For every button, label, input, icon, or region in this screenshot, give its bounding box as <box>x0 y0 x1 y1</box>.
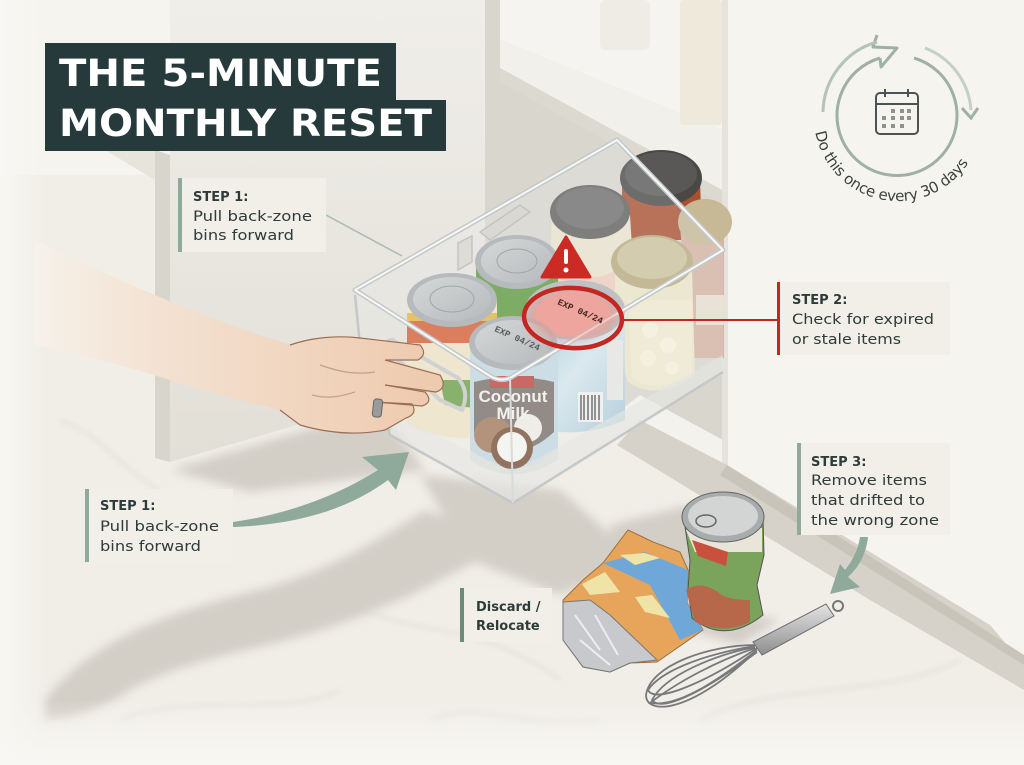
callout: step 1 lower: Pull back-zone <box>100 519 219 535</box>
callout: step 3: Remove items <box>811 473 927 489</box>
can: coconut milk: Coconut <box>479 387 548 406</box>
right cabinet panel <box>727 0 1024 660</box>
arrow: pull forward <box>233 452 409 527</box>
crushed can with beans <box>682 492 764 631</box>
callout: step 3: that drifted to <box>811 493 925 509</box>
chips bag <box>563 530 703 672</box>
callout: step 2 <box>622 282 950 355</box>
text: frequency note: Do this once every 30 days <box>816 131 968 204</box>
callout: discard or relocate <box>460 588 552 642</box>
callout: step 1 lower: STEP 1: <box>100 499 155 514</box>
callout: step 1 lower <box>85 489 233 562</box>
can: coconut milk <box>469 316 558 474</box>
callout: step 3 <box>797 443 950 535</box>
callout: discard or relocate: Relocate <box>476 619 540 634</box>
marble veins <box>60 420 960 722</box>
cabinet interior <box>485 0 727 465</box>
warning triangle icon <box>542 237 590 277</box>
bin back and jars <box>407 150 732 474</box>
callout: discard or relocate: Discard / <box>476 600 541 615</box>
jar: red sauce <box>620 150 702 240</box>
can: coconut milk: EXP 04/24 <box>493 325 542 354</box>
callout: step 1 upper: STEP 1: <box>193 190 248 205</box>
callout: step 3: the wrong zone <box>811 513 939 529</box>
icon: wedding ring <box>372 399 383 417</box>
callout: step 2: or stale items <box>792 332 901 348</box>
can: green label <box>475 235 559 320</box>
jar: garlic with gold lid <box>611 235 695 391</box>
callout: step 2: Check for expired <box>792 312 934 328</box>
icon: inner ring arrow <box>823 35 978 176</box>
title: THE 5-MINUTE <box>59 52 382 95</box>
callout: step 1 lower: bins forward <box>100 539 201 555</box>
cast shadow: arm and bin <box>45 408 780 720</box>
callout: step 2: STEP 2: <box>792 293 847 308</box>
jar: white with dark lid <box>548 185 636 310</box>
shelf lip under the bin <box>618 395 723 465</box>
red expiry ring with date: EXP 04/24 <box>556 298 605 327</box>
arrow: step 3 to items <box>830 537 868 594</box>
can: expired blue label <box>525 280 625 432</box>
red expiry ring with date <box>522 285 624 351</box>
can: coconut milk: Milk <box>496 404 530 423</box>
icon: calendar <box>876 89 918 134</box>
whisk <box>646 601 843 707</box>
title <box>45 43 446 151</box>
callout: step 1 upper <box>178 178 402 256</box>
cabinet side panel <box>170 0 485 462</box>
cycle icon: calendar with arrows <box>816 34 980 204</box>
callout: step 1 upper: Pull back-zone <box>193 209 312 225</box>
clear pull-out bin <box>355 140 723 503</box>
callout: step 1 upper: bins forward <box>193 228 294 244</box>
hand gripping bin handle <box>35 240 443 433</box>
can: yellow and red label <box>407 273 497 438</box>
toe kick <box>617 420 1024 690</box>
callout: step 3: STEP 3: <box>811 455 866 470</box>
title: MONTHLY RESET <box>59 102 433 145</box>
jar: right back <box>678 199 732 358</box>
